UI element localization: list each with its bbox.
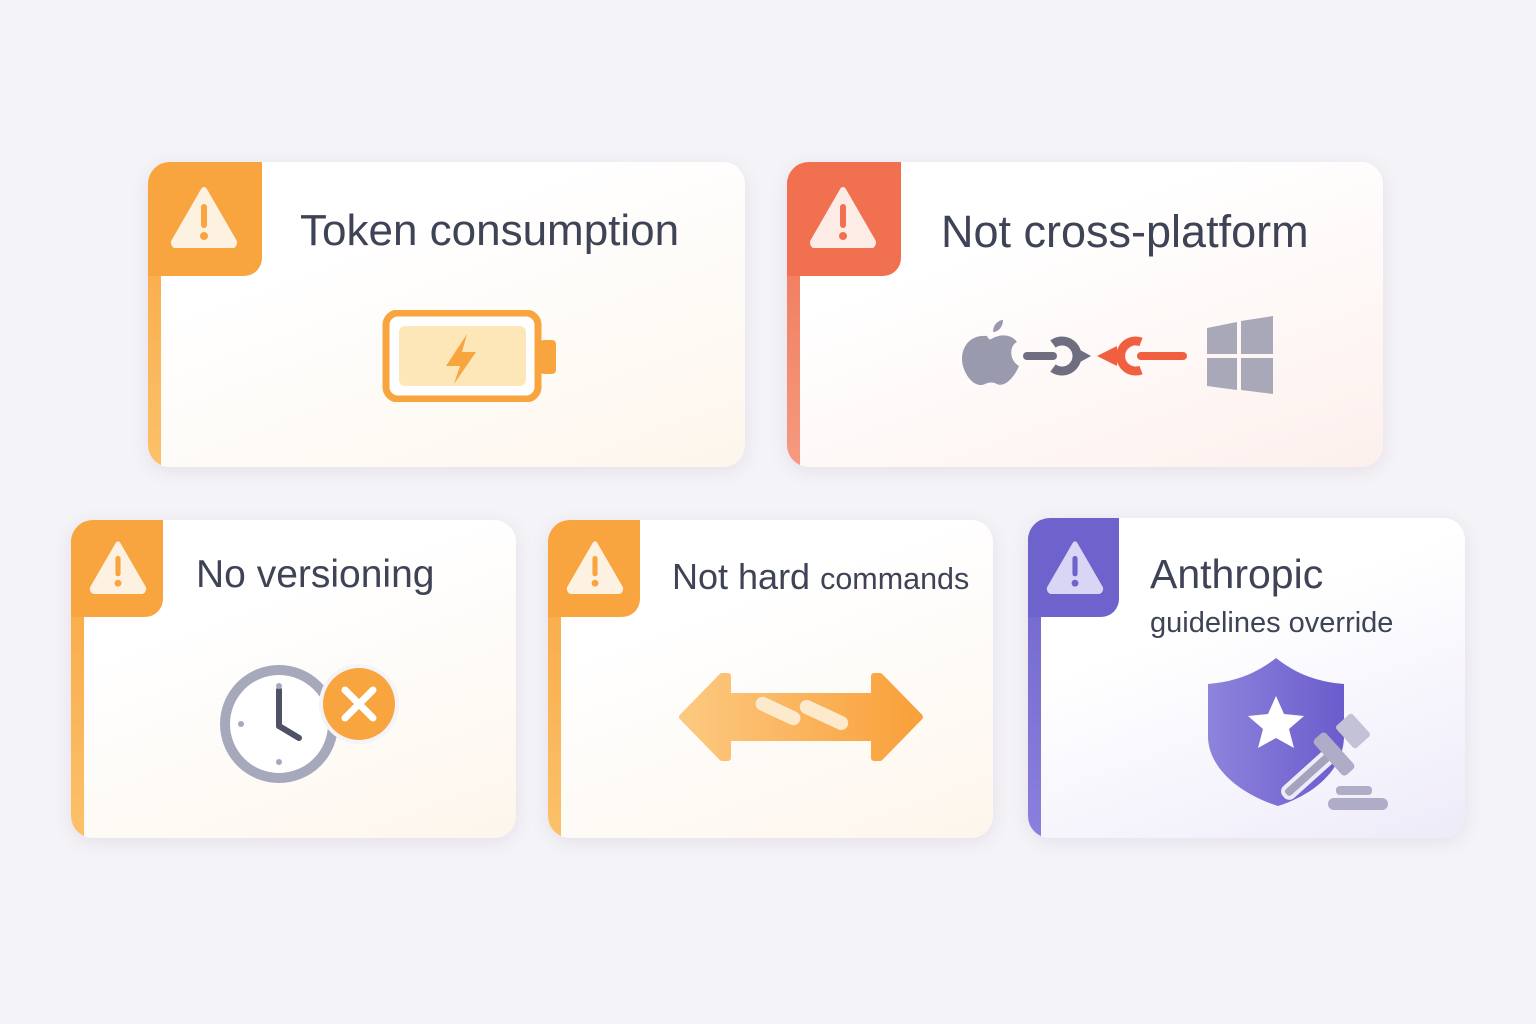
icon: clock with x bbox=[220, 664, 399, 783]
warning tab bbox=[148, 162, 262, 276]
warning tab bbox=[1028, 518, 1119, 617]
card: anthropic guidelines override bbox=[1028, 518, 1465, 838]
title: Anthropic bbox=[1150, 551, 1323, 597]
title: No versioning bbox=[196, 553, 434, 596]
title: Token consumption bbox=[300, 206, 679, 255]
subtitle: guidelines override bbox=[1150, 607, 1393, 639]
card: not hard commands bbox=[548, 520, 993, 838]
card: no versioning bbox=[71, 520, 516, 838]
icon: platforms disconnected bbox=[962, 316, 1273, 394]
icon: broken double arrow bbox=[679, 673, 923, 761]
warning tab bbox=[548, 520, 640, 617]
warning tab bbox=[71, 520, 163, 617]
card: token consumption bbox=[148, 162, 745, 467]
card: not cross-platform bbox=[787, 162, 1383, 467]
icon: battery bbox=[382, 310, 556, 402]
warning tab bbox=[787, 162, 901, 276]
title: Not cross-platform bbox=[941, 206, 1309, 257]
icon: shield with gavel bbox=[1208, 658, 1388, 810]
title: Not hard commands bbox=[672, 556, 969, 597]
